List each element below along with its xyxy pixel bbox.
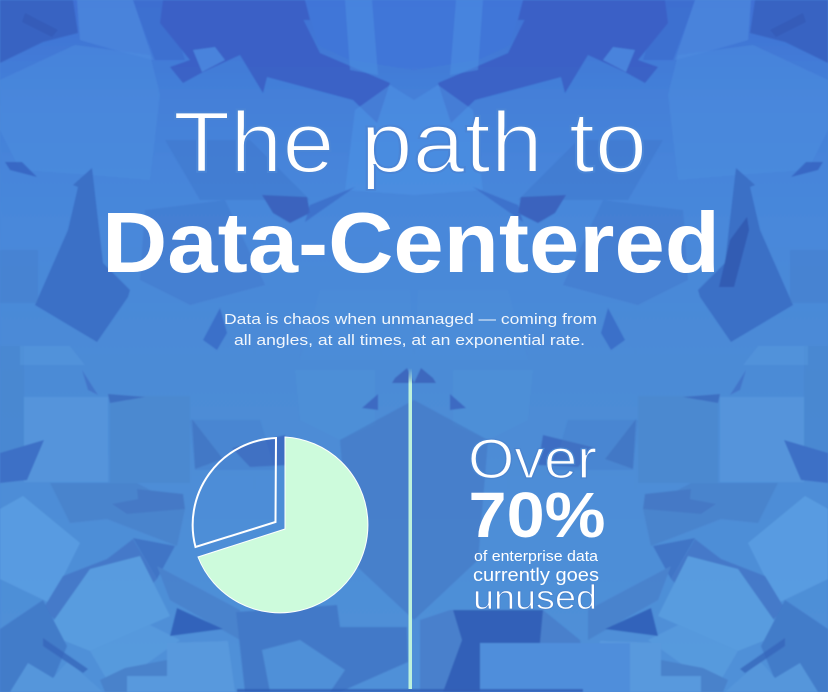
intro text: Data is chaos when unmanaged — coming from (224, 311, 597, 328)
stat callout (468, 427, 606, 617)
title line 1: The path to (173, 95, 647, 191)
title (102, 95, 720, 291)
description: of enterprise data (474, 548, 599, 565)
intro text: all angles, at all times, at an exponential rate. (234, 332, 585, 349)
intro text (224, 311, 597, 349)
over label: Over (468, 427, 597, 490)
title line 2: Data-Centered (102, 196, 720, 291)
pie chart: 70 percent (193, 437, 368, 613)
70 percent: 70% (468, 479, 606, 551)
unused slice (198, 437, 368, 613)
vertical divider (408, 368, 412, 689)
used slice outline (193, 438, 276, 547)
stat callout: currently goes (473, 565, 599, 585)
stat callout: unused (473, 579, 597, 617)
